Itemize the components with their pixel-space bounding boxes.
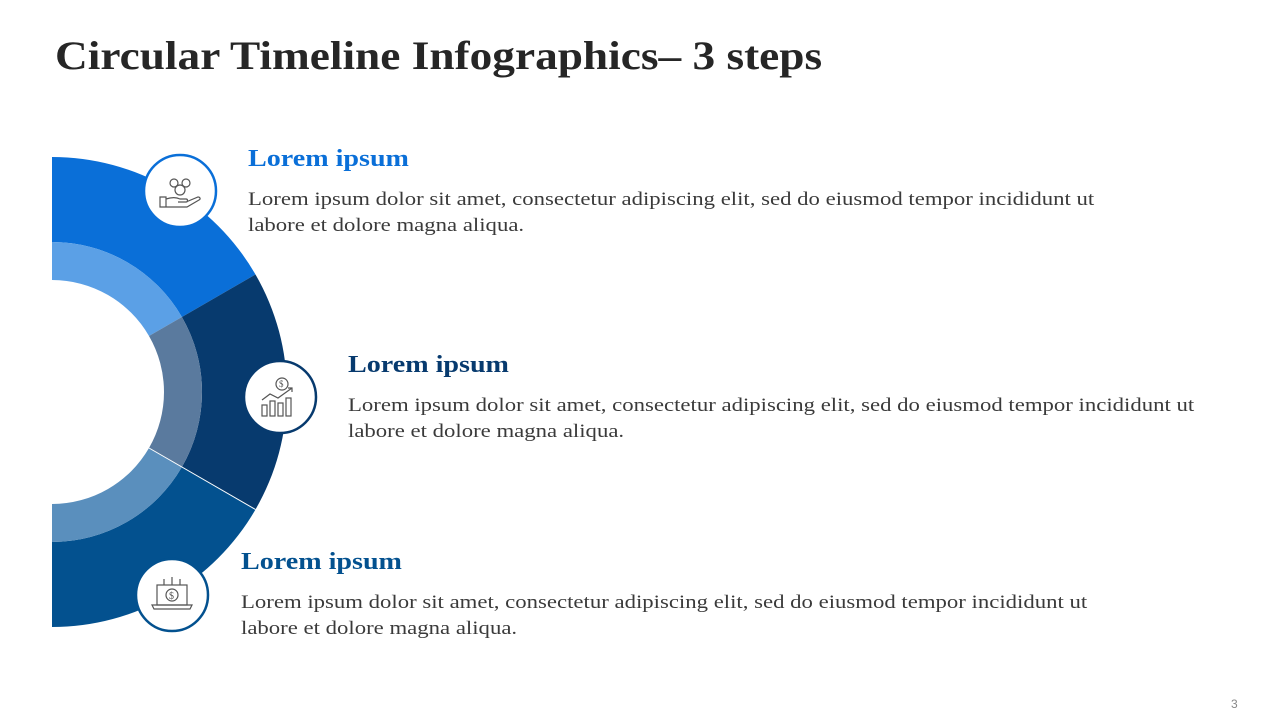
segment 1 xyxy=(52,157,256,336)
segment 2 xyxy=(149,274,287,510)
step 2 text: Lorem ipsum dolor sit amet, consectetur adipiscing elit, sed do eiusmod tempor incididunt ut xyxy=(348,396,1194,416)
segment 3 xyxy=(52,448,256,627)
step 2 text: Lorem ipsum xyxy=(348,352,509,378)
icon: laptop with dollar: $ xyxy=(169,591,174,602)
icon: laptop with dollar xyxy=(136,559,208,631)
step 1 text: Lorem ipsum dolor sit amet, consectetur adipiscing elit, sed do eiusmod tempor incididunt ut xyxy=(248,190,1094,210)
step 3 text: Lorem ipsum xyxy=(241,549,402,575)
title: Circular Timeline Infographics– 3 steps xyxy=(55,33,822,78)
step 1 text xyxy=(248,146,1094,236)
step 1 text: Lorem ipsum xyxy=(248,146,409,172)
step 2 text: labore et dolore magna aliqua. xyxy=(348,422,624,442)
step 3 text: Lorem ipsum dolor sit amet, consectetur adipiscing elit, sed do eiusmod tempor incididunt ut xyxy=(241,593,1087,613)
step 1 text: labore et dolore magna aliqua. xyxy=(248,216,524,236)
page number: 3 xyxy=(1231,697,1238,711)
step 3 text: labore et dolore magna aliqua. xyxy=(241,619,517,639)
icon: hand with people xyxy=(144,155,216,227)
icon: growth chart with dollar: $ xyxy=(279,379,284,389)
step 2 text xyxy=(348,352,1194,442)
step 3 text xyxy=(241,549,1088,639)
icon: growth chart with dollar xyxy=(244,361,316,433)
